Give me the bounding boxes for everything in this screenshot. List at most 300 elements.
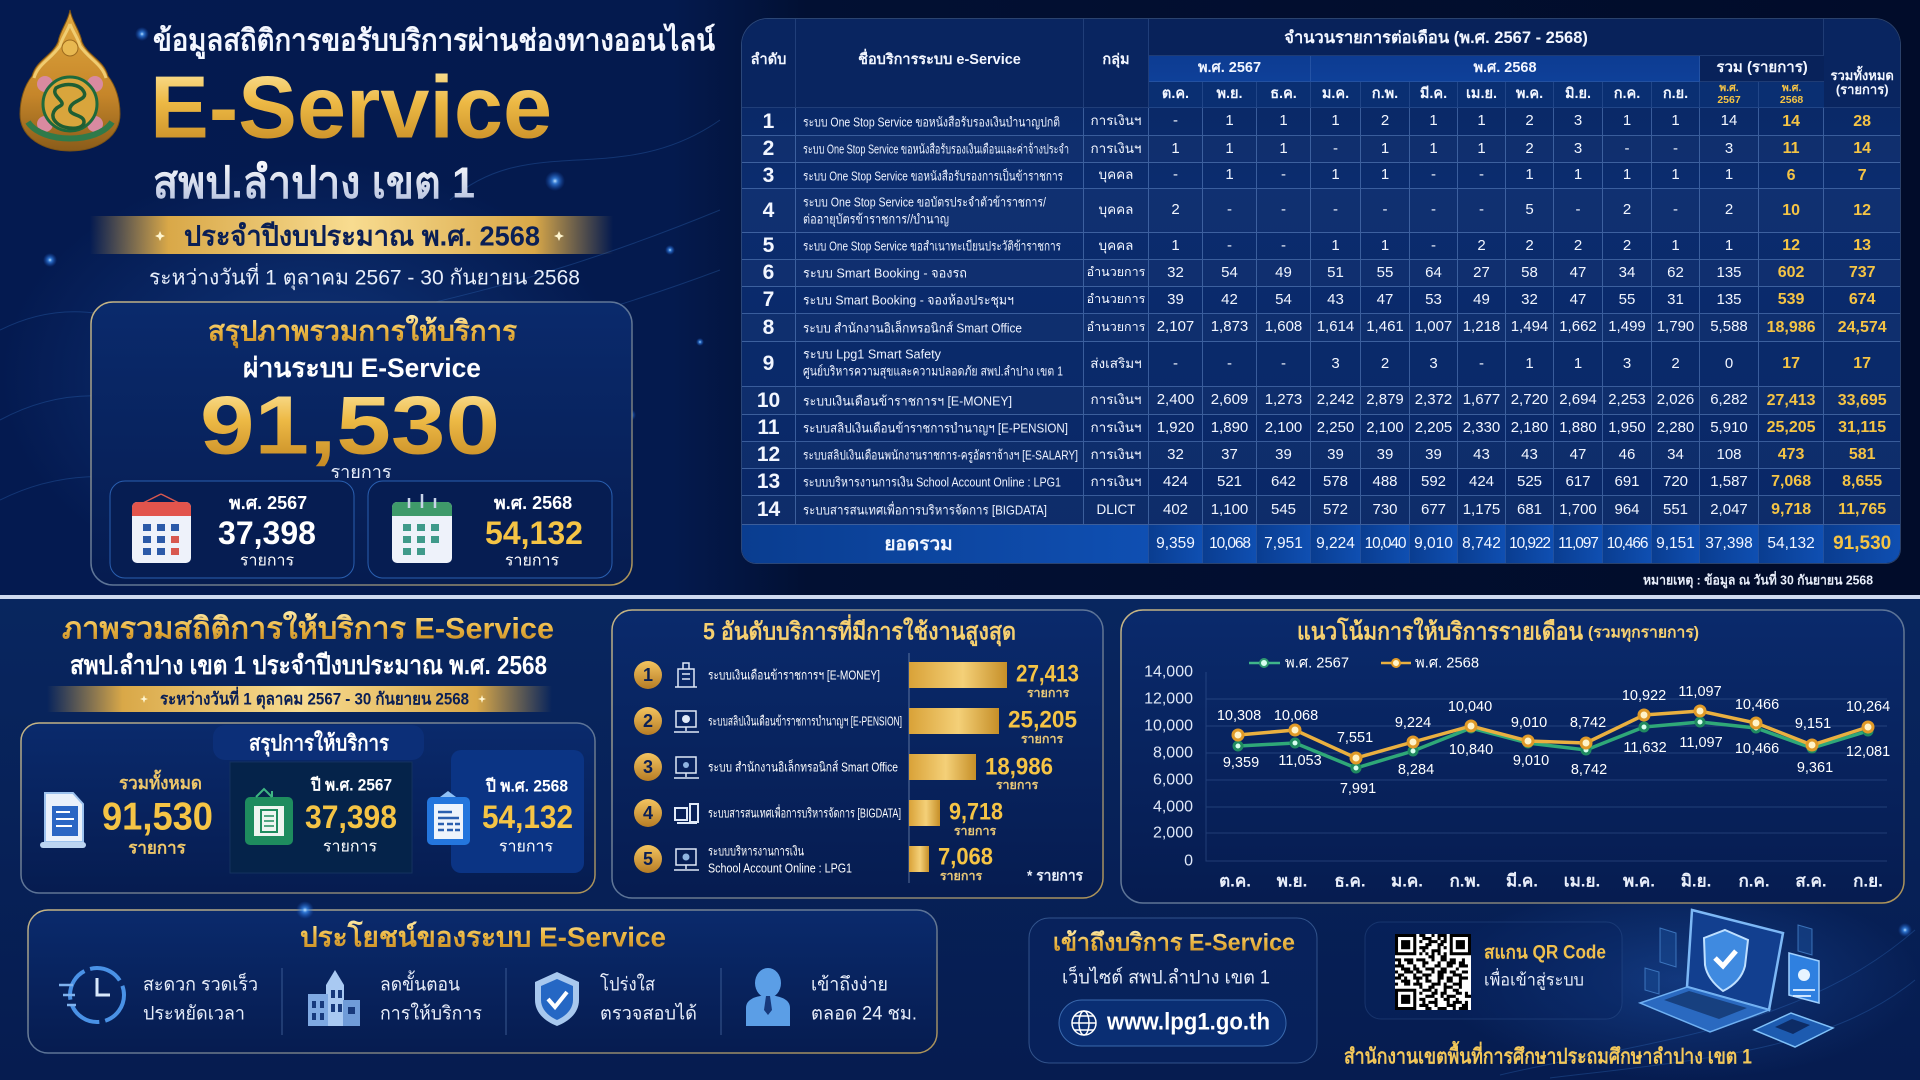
row 7: 32 (1521, 291, 1538, 308)
benefit: accessible (746, 968, 917, 1026)
line: 2568 (1233, 706, 1873, 763)
item 4: BIGDATA: 4 (643, 803, 653, 823)
y axis and grid: 10,000 (1144, 718, 1193, 734)
row 5: - (1431, 237, 1436, 254)
row 3: 1 (1381, 166, 1389, 183)
row 14: 11,765 (1838, 501, 1886, 518)
value: 54,132 (482, 799, 573, 835)
x axis months: พ.ค. (1623, 872, 1655, 890)
table: monthly service statistics: กลุ่ม (1102, 52, 1130, 68)
data labels: lower: 8,742 (1571, 762, 1607, 778)
icon: document laptop (40, 793, 86, 848)
data labels: upper: 11,097 (1678, 684, 1722, 700)
row 12: 34 (1667, 446, 1684, 463)
data labels: lower: 12,081 (1846, 744, 1890, 760)
row 7: 7 (763, 288, 774, 311)
row 12: 39 (1275, 446, 1292, 463)
row 6: 32 (1167, 264, 1184, 281)
value 54,132: 54,132 (485, 515, 583, 551)
table: monthly service statistics: จำนวนรายการต่อเดือน (พ.ศ. 2567 - 2568) (1284, 29, 1588, 47)
data labels: upper: 10,466 (1735, 697, 1779, 713)
row 7: 43 (1327, 291, 1344, 308)
footer: office name: สำนักงานเขตพื้นที่การศึกษาประถมศึกษาลำปาง เขต 1 (1344, 1040, 1752, 1068)
row 4: - (1382, 201, 1388, 218)
row 2: 14 (1853, 140, 1871, 157)
item 2: E-PENSION: 2 (643, 711, 653, 731)
row 5: 2 (1623, 237, 1631, 254)
title: E-Service: E-Service (150, 58, 552, 156)
table: monthly service statistics: 2567 (1717, 94, 1741, 106)
access subtitle: เว็บไซต์ สพป.ลำปาง เขต 1 (1062, 964, 1270, 988)
icon: blue clipboard (427, 791, 470, 845)
row 3: 1 (1525, 166, 1534, 183)
row 6: 54 (1221, 264, 1238, 281)
row 11: 25,205 (1767, 419, 1816, 436)
total row: 54,132 (1767, 535, 1815, 552)
row 9: 9 (763, 352, 774, 375)
data labels: upper: 7,551 (1337, 730, 1373, 746)
x axis months: มี.ค. (1506, 870, 1538, 890)
item 4: BIGDATA: ระบบสารสนเทศเพื่อการบริหารจัดการ [BIGDATA] (708, 804, 901, 820)
row 14: 2,047 (1710, 501, 1748, 518)
row 8: 1,873 (1211, 318, 1248, 335)
unit: รายการ (323, 838, 378, 856)
row 7: 55 (1619, 291, 1635, 308)
row 9: 1 (1574, 355, 1582, 372)
chart title: แนวโน้มการให้บริการรายเดือน (1297, 616, 1584, 646)
total row: 10,922 (1509, 535, 1550, 552)
total row: 91,530 (1833, 533, 1891, 554)
icon: shield check (535, 972, 579, 1026)
data labels: lower: 10,466 (1735, 741, 1779, 757)
line: 2567 (1234, 718, 1872, 772)
row 13: 424 (1469, 473, 1494, 490)
item 5: School Account Online: 5 (643, 849, 653, 869)
row 14: 681 (1517, 501, 1542, 518)
row 12: การเงินฯ (1090, 447, 1142, 462)
table: monthly service statistics: 2568 (1780, 94, 1803, 106)
row 8: 1,499 (1608, 318, 1646, 335)
row 9: 17 (1853, 355, 1871, 372)
row 13: 1,587 (1710, 473, 1748, 490)
row 9: - (1281, 355, 1286, 372)
row 6: 64 (1425, 264, 1442, 281)
data labels: lower: 9,361 (1797, 760, 1833, 776)
item 3: Smart Office: รายการ (996, 778, 1038, 792)
row 10: 2,253 (1608, 391, 1646, 408)
row 12: 43 (1473, 446, 1490, 463)
row 10: 2,694 (1559, 391, 1597, 408)
total row (742, 525, 1900, 563)
row 4: - (1281, 201, 1286, 218)
row 2: 1 (1225, 140, 1234, 157)
y axis and grid: 8,000 (1153, 744, 1193, 762)
row 8: 5,588 (1710, 318, 1748, 335)
row 4: 4 (763, 199, 774, 222)
row 8: 8 (763, 316, 774, 339)
benefit: fewer steps: ลดขั้นตอน (380, 970, 460, 996)
total value: 91,530 (102, 796, 213, 838)
row 14: 545 (1271, 501, 1296, 518)
row 9: ส่งเสริมฯ (1090, 356, 1142, 371)
row 11 (742, 415, 1900, 442)
row 14: 1,100 (1211, 501, 1248, 518)
y axis and grid (1144, 664, 1887, 870)
total row: 37,398 (1705, 535, 1753, 552)
row 8: 1,494 (1511, 318, 1548, 335)
row 1: 1 (1623, 112, 1631, 129)
row 4: - (1673, 201, 1678, 218)
access heading: เข้าถึงบริการ E-Service (1053, 930, 1295, 956)
row 1: 1 (763, 110, 774, 133)
row 11: 2,180 (1511, 419, 1548, 436)
row 8: 1,662 (1559, 318, 1597, 335)
item 2: E-PENSION: ระบบสลิปเงินเดือนข้าราชการบำนาญฯ [E-PENSION] (708, 714, 902, 728)
row 8: 1,608 (1265, 318, 1302, 335)
row 12: 46 (1619, 446, 1635, 463)
row 6: 62 (1667, 264, 1684, 281)
row 4: - (1431, 201, 1436, 218)
data labels: upper: 10,040 (1448, 699, 1492, 715)
table: monthly service statistics: รวมทั้งหมด (1830, 68, 1894, 83)
row 11: 31,115 (1838, 419, 1886, 436)
data labels: lower: 9,010 (1513, 753, 1549, 769)
row 6: 34 (1619, 264, 1635, 281)
row 13: 488 (1372, 473, 1398, 490)
row 4: 10 (1782, 202, 1800, 219)
total row: 9,151 (1656, 535, 1695, 552)
sub-panel: year 2568 (368, 481, 612, 578)
row 6: 55 (1377, 264, 1393, 281)
row 7: 42 (1221, 291, 1238, 308)
row 5: บุคคล (1099, 238, 1133, 253)
x axis months: มิ.ย. (1681, 872, 1711, 890)
date range: ระหว่างวันที่ 1 ตุลาคม 2567 - 30 กันยายน 2568 (149, 262, 580, 290)
year label: ปี พ.ศ. 2567 (310, 774, 392, 794)
row 9: 2 (1381, 355, 1389, 372)
banner: date range: ระหว่างวันที่ 1 ตุลาคม 2567 - 30 กันยายน 2568 (160, 686, 469, 710)
row 11: 1,920 (1157, 419, 1194, 436)
panel: service summary (21, 723, 595, 893)
row 5: 1 (1381, 237, 1389, 254)
row 9: - (1227, 355, 1232, 372)
stat: total (40, 769, 213, 858)
row 12: 12 (757, 443, 780, 466)
row 13: 521 (1217, 473, 1242, 490)
note: unit: * รายการ (1027, 868, 1084, 884)
row 3: 3 (763, 164, 774, 187)
row 5: 2 (1574, 237, 1582, 254)
data labels: lower: 11,053 (1278, 753, 1322, 769)
row 3 (742, 163, 1900, 189)
total row: ยอดรวม (884, 534, 953, 555)
row 13: 8,655 (1842, 473, 1882, 490)
row 2: 1 (1171, 140, 1180, 157)
row 10: 2,720 (1511, 391, 1548, 408)
row 3: - (1173, 166, 1178, 183)
row 13: การเงินฯ (1090, 474, 1142, 489)
row 2: 1 (1279, 140, 1288, 157)
row 8: 1,218 (1463, 318, 1500, 335)
benefit: accessible: เข้าถึงง่าย (811, 974, 888, 996)
row 2: - (1673, 140, 1678, 157)
row 2: 2 (1525, 140, 1534, 157)
row 13: 578 (1323, 473, 1348, 490)
overview heading: สรุปภาพรวมการให้บริการ (208, 314, 517, 348)
website pill (1059, 1000, 1286, 1046)
benefit: transparent (535, 972, 697, 1026)
row 14: DLICT (1096, 502, 1136, 517)
row 11: 2,205 (1415, 419, 1452, 436)
total row: 9,359 (1156, 535, 1195, 552)
icon: red calendar (132, 494, 191, 563)
item 1: E-MONEY: 1 (643, 665, 653, 685)
table: monthly service statistics: ม.ค. (1322, 86, 1349, 102)
unit: รายการ (505, 552, 560, 570)
row 12: 39 (1425, 446, 1442, 463)
row 2: 3 (1574, 140, 1582, 157)
panel: top 5 services (612, 610, 1103, 898)
item 4: BIGDATA: 9,718 (949, 798, 1003, 826)
row 6: 27 (1473, 264, 1490, 281)
row 4: 2 (1623, 201, 1631, 218)
row 5: 13 (1853, 237, 1871, 254)
row 5: 5 (763, 234, 774, 257)
legend (1249, 654, 1479, 672)
row 5: 1 (1171, 237, 1180, 254)
row 9 (742, 342, 1900, 387)
row 14: 572 (1323, 501, 1348, 518)
row 9: 17 (1782, 355, 1800, 372)
value: 37,398 (305, 799, 397, 835)
chart subtitle: (รวมทุกรายการ) (1588, 624, 1699, 642)
table: monthly service statistics: (รายการ) (1836, 82, 1889, 97)
item 2: E-PENSION (634, 706, 1077, 746)
row 13: 617 (1565, 473, 1591, 490)
grand total number: 91,530 (200, 378, 500, 472)
row 7: 31 (1667, 291, 1684, 308)
row 14: 1,700 (1559, 501, 1597, 518)
row 14: 964 (1614, 501, 1640, 518)
row 7: 539 (1778, 291, 1804, 308)
row 4 (742, 189, 1900, 233)
total row: 9,224 (1316, 535, 1355, 552)
row 2: การเงินฯ (1090, 141, 1142, 156)
row 10: 27,413 (1767, 392, 1816, 409)
row 13: 7,068 (1771, 473, 1811, 490)
row 1: 1 (1225, 112, 1234, 129)
row 5: 1 (1725, 237, 1733, 254)
banner: fiscal year (90, 216, 613, 254)
panel: service overview summary (91, 302, 632, 585)
row 7: 49 (1473, 291, 1490, 308)
item 3: Smart Office: 3 (643, 757, 653, 777)
table: monthly service statistics: พ.ค. (1516, 86, 1543, 102)
row 10: 1,677 (1463, 391, 1500, 408)
total row: 7,951 (1264, 535, 1303, 552)
total row: 10,040 (1365, 535, 1405, 552)
x axis months: ก.ย. (1853, 872, 1883, 890)
row 11: 1,890 (1211, 419, 1248, 436)
row 13: 691 (1614, 473, 1640, 490)
row 4: 12 (1853, 202, 1871, 219)
row 4: - (1576, 201, 1580, 218)
row 9: 3 (1331, 355, 1340, 372)
row 12: 39 (1327, 446, 1344, 463)
row 5: - (1227, 237, 1232, 254)
top 5 heading: 5 อันดับบริการที่มีการใช้งานสูงสุด (703, 614, 1016, 648)
benefits heading: ประโยชน์ของระบบ E-Service (300, 920, 666, 952)
data labels: upper: 10,308 (1217, 708, 1261, 724)
row 2: 3 (1725, 140, 1733, 157)
row 13: 525 (1517, 473, 1542, 490)
row 2: 2 (763, 137, 774, 160)
row 8: อำนวยการ (1087, 320, 1145, 334)
benefit: transparent: ตรวจสอบได้ (600, 1002, 697, 1024)
row 10: 2,372 (1415, 391, 1452, 408)
row 8: 1,614 (1317, 318, 1354, 335)
row 10: 2,879 (1366, 391, 1404, 408)
data labels: lower (1223, 735, 1890, 797)
row 4: บุคคล (1099, 202, 1133, 217)
row 13 (742, 469, 1900, 496)
row 1: 1 (1331, 112, 1340, 129)
table: monthly service statistics: ชื่อบริการระบบ e-Service (858, 52, 1021, 68)
row 13: 720 (1663, 473, 1688, 490)
row 3: 1 (1671, 166, 1680, 183)
row 1: 3 (1574, 112, 1582, 129)
row 8: 24,574 (1838, 319, 1887, 336)
row 5: 1 (1671, 237, 1680, 254)
data labels: lower: 9,359 (1223, 755, 1259, 771)
illustration: laptop with shield (1640, 910, 1833, 1047)
row 7: อำนวยการ (1087, 292, 1145, 306)
data labels: lower: 7,991 (1340, 781, 1376, 797)
benefit: convenient: ประหยัดเวลา (143, 1004, 245, 1024)
row 2: - (1333, 140, 1338, 157)
row 3: 1 (1574, 166, 1582, 183)
row 2: 1 (1477, 140, 1486, 157)
total unit: รายการ (128, 838, 187, 858)
row 12: 39 (1377, 446, 1393, 463)
data labels: upper: 8,742 (1570, 715, 1606, 731)
row 10: ระบบเงินเดือนข้าราชการฯ [E-MONEY] (803, 393, 1012, 408)
x axis months: ส.ค. (1795, 872, 1827, 890)
tab: summary heading: สรุปการให้บริการ (249, 730, 389, 758)
row 6: อำนวยการ (1087, 265, 1145, 279)
row 3: - (1431, 166, 1436, 183)
row 6: 47 (1570, 264, 1586, 281)
row 5: 2 (1525, 237, 1534, 254)
data labels: upper: 10,068 (1274, 708, 1318, 724)
row 5: 1 (1331, 237, 1340, 254)
total row: 10,466 (1607, 535, 1647, 552)
row 10 (742, 387, 1900, 415)
table: monthly service statistics: พ.ศ. (1719, 82, 1739, 94)
row 1: 1 (1429, 112, 1438, 129)
row 1: การเงินฯ (1090, 113, 1142, 128)
item 5: School Account Online: 7,068 (938, 844, 993, 870)
data labels: upper: 10,922 (1622, 688, 1666, 704)
row 1: 1 (1477, 112, 1486, 129)
row 9: 0 (1725, 355, 1733, 372)
benefit: fewer steps: การให้บริการ (380, 1002, 482, 1024)
icon: clock (59, 968, 124, 1022)
total row: 10,068 (1209, 535, 1250, 552)
website pill: www.lpg1.go.th (1106, 1008, 1270, 1036)
row 5: 12 (1782, 237, 1800, 254)
row 2 (742, 136, 1900, 163)
data labels: lower: 10,840 (1449, 742, 1493, 758)
icon: buildings (308, 970, 360, 1026)
row 2: 11 (1783, 140, 1800, 157)
data labels: upper: 10,264 (1846, 699, 1890, 715)
benefit: fewer steps (308, 970, 482, 1026)
row 1: 14 (1721, 112, 1737, 129)
row 7: 135 (1716, 291, 1742, 308)
row 4: 2 (1725, 201, 1733, 218)
subheading: bottom overview: สพป.ลำปาง เขต 1 ประจำปีงบประมาณ พ.ศ. 2568 (70, 650, 547, 680)
row 3: 1 (1725, 166, 1733, 183)
row 4: - (1227, 201, 1232, 218)
row 10: 10 (757, 389, 780, 412)
item 1: E-MONEY: ระบบเงินเดือนข้าราชการฯ [E-MONEY] (708, 668, 880, 682)
row 6: 737 (1849, 264, 1876, 281)
row 8: 1,790 (1657, 318, 1694, 335)
row 9: 3 (1429, 355, 1438, 372)
legend: พ.ศ. 2568 (1415, 654, 1479, 672)
row 11: 2,100 (1265, 419, 1302, 436)
row 10: 6,282 (1710, 391, 1748, 408)
item 5: School Account Online (634, 844, 993, 883)
row 10: 2,026 (1657, 391, 1694, 408)
y axis and grid: 2,000 (1153, 824, 1193, 842)
icon: globe (1072, 1011, 1096, 1035)
x axis months: ต.ค. (1219, 872, 1251, 890)
item 2: E-PENSION: 25,205 (1008, 706, 1077, 734)
x axis months: ม.ค. (1391, 872, 1423, 890)
row 12: 473 (1778, 446, 1804, 463)
panel: benefits (28, 901, 937, 1053)
data labels: upper (1217, 684, 1890, 746)
item 5: School Account Online: รายการ (940, 869, 982, 883)
row 1 (742, 108, 1900, 136)
row 3: 1 (1623, 166, 1631, 183)
row 7: 53 (1425, 291, 1442, 308)
table: monthly service statistics: ลำดับ (751, 52, 786, 68)
row 3: 1 (1225, 166, 1234, 183)
item 5: School Account Online: School Account Online : LPG1 (708, 860, 852, 876)
row 7 (742, 287, 1900, 314)
row 11: 2,100 (1366, 419, 1404, 436)
row 1: 1 (1671, 112, 1680, 129)
item 1: E-MONEY: รายการ (1027, 686, 1069, 700)
row 10: การเงินฯ (1090, 392, 1142, 407)
row 3: 7 (1858, 167, 1867, 184)
row 3: 1 (1331, 166, 1340, 183)
row 2: - (1624, 140, 1630, 157)
table: monthly service statistics (742, 19, 1900, 563)
benefit: transparent: โปร่งใส (600, 972, 655, 996)
QR caption: เพื่อเข้าสู่ระบบ (1484, 968, 1584, 990)
row 8 (742, 314, 1900, 342)
table: monthly service statistics: เม.ย. (1466, 86, 1497, 102)
row 9: ระบบ Lpg1 Smart Safety (803, 346, 941, 362)
row 11: 2,250 (1317, 419, 1354, 436)
row 6: 49 (1275, 264, 1292, 281)
row 3: บุคคล (1099, 167, 1133, 182)
row 7: 39 (1167, 291, 1184, 308)
